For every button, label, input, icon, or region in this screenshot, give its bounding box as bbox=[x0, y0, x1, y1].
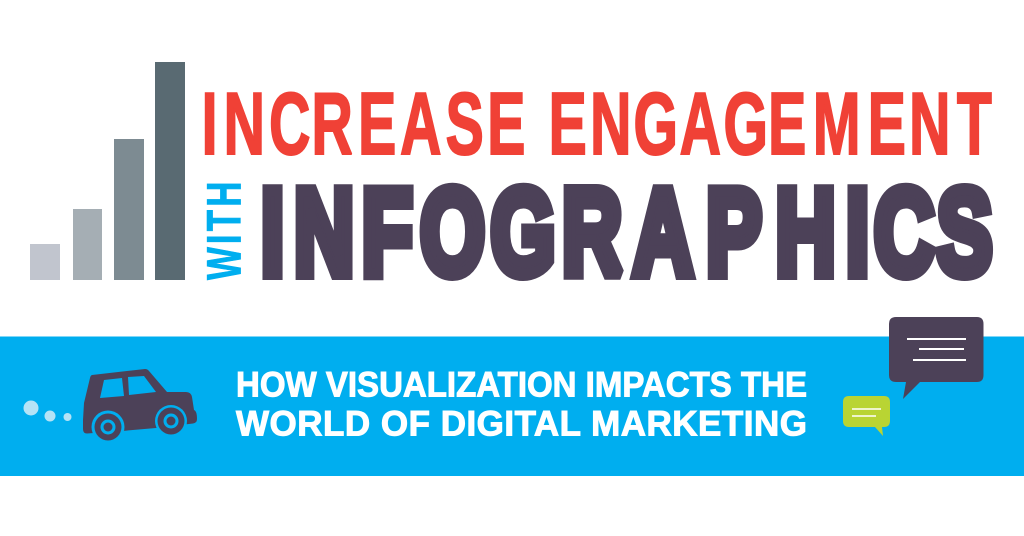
icon: car bbox=[83, 369, 197, 444]
title: increase engagement: INCREASE ENGAGEMENT bbox=[202, 75, 992, 173]
banner line 1: HOW VISUALIZATION IMPACTS THE bbox=[236, 366, 807, 404]
bar chart icon bbox=[30, 62, 185, 280]
icon: dark speech bubble bbox=[889, 317, 984, 399]
title: with: WITH bbox=[197, 182, 251, 280]
blue banner bbox=[0, 336, 1024, 476]
icon: green speech bubble bbox=[843, 396, 890, 436]
banner line 2: WORLD OF DIGITAL MARKETING bbox=[236, 404, 807, 444]
icon: exhaust puffs bbox=[24, 400, 72, 422]
title: infographics: INFOGRAPHICS bbox=[261, 165, 992, 301]
banner text bbox=[236, 366, 807, 444]
